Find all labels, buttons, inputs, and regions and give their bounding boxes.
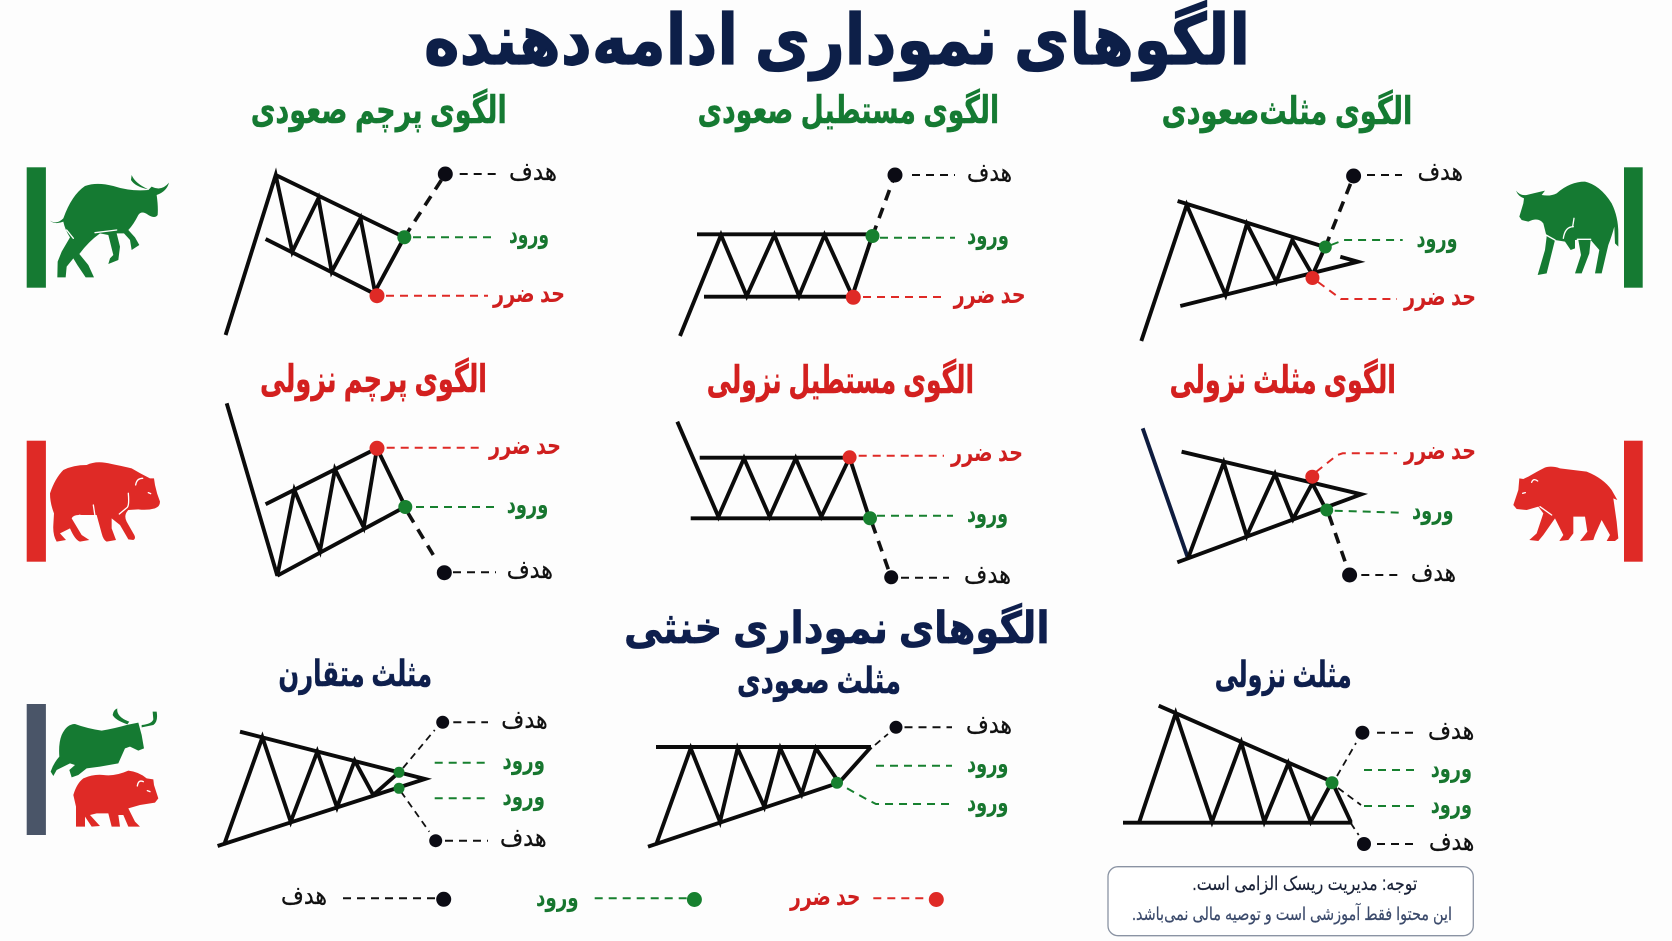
panel: bear triangle	[1143, 358, 1476, 587]
label: target lower: هدف	[1429, 828, 1474, 856]
chart: bull rectangle lines	[680, 234, 872, 336]
label: entry lower: ورود	[967, 789, 1008, 818]
chart: bear rectangle lines	[677, 422, 869, 518]
bearish marker bar left	[27, 441, 46, 562]
icon: bull left	[50, 175, 169, 277]
panel: descending triangle	[1123, 654, 1474, 856]
heading: bear triangle: الگوی مثلث نزولی	[1170, 358, 1396, 403]
label: stop loss: حد ضرر	[491, 280, 565, 309]
bullish marker bar left	[27, 167, 46, 288]
label: entry upper: ورود	[1431, 755, 1472, 784]
chart: descending triangle lines	[1123, 706, 1352, 823]
note line 1: توجه: مدیریت ریسک الزامی است.‏	[1192, 874, 1417, 895]
legend: stop loss	[788, 883, 944, 912]
bearish marker bar right	[1624, 441, 1643, 562]
title: الگوهای نموداری ادامه‌دهنده	[424, 0, 1250, 81]
panel: bear flag	[227, 357, 561, 584]
label: stop loss: حد ضرر	[949, 439, 1023, 468]
chart: bull flag lines	[226, 175, 404, 335]
chart: bear flag lines	[227, 403, 405, 576]
heading: bull rectangle: الگوی مستطیل صعودی	[698, 88, 999, 132]
legend: stop loss: حد ضرر	[788, 883, 860, 912]
icon: small bear	[73, 771, 158, 827]
chart: bull triangle lines	[1141, 201, 1358, 341]
label: entry lower: ورود	[502, 783, 545, 812]
label: entry: ورود	[507, 491, 548, 520]
label: entry: ورود	[967, 500, 1008, 529]
label: entry upper: ورود	[502, 747, 545, 776]
panel: bear rectangle	[677, 358, 1023, 589]
icon: bear right	[1513, 467, 1618, 541]
heading: bull triangle: الگوی مثلث‌صعودی	[1162, 89, 1412, 133]
label: target: هدف	[507, 556, 553, 584]
label: entry: ورود	[1416, 225, 1458, 254]
label: target: هدف	[967, 159, 1012, 187]
callout: risk note	[1108, 867, 1473, 936]
legend	[281, 882, 944, 913]
label: target: هدف	[964, 561, 1011, 589]
heading: bull flag: الگوی پرچم صعودی	[251, 88, 507, 133]
label: target: هدف	[509, 158, 557, 186]
label: entry upper: ورود	[967, 750, 1008, 779]
legend: target: هدف	[281, 882, 327, 910]
icon: bull right	[1516, 182, 1618, 275]
bullish marker bar right	[1624, 167, 1643, 288]
heading: ascending triangle: مثلث صعودی	[737, 660, 901, 702]
legend: target	[281, 882, 451, 910]
label: entry: ورود	[509, 221, 549, 250]
panel: symmetric triangle	[218, 653, 548, 852]
legend: entry: ورود	[536, 884, 579, 913]
label: target: هدف	[1411, 559, 1456, 587]
label: stop loss: حد ضرر	[1402, 437, 1476, 466]
label: target upper: هدف	[501, 706, 548, 734]
heading: bear flag: الگوی پرچم نزولی	[260, 357, 487, 402]
label: target lower: هدف	[500, 824, 547, 852]
section heading: neutral patterns: الگوهای نموداری خنثی	[624, 602, 1050, 654]
label: entry: ورود	[1412, 497, 1454, 526]
chart: symmetric triangle lines	[218, 732, 425, 846]
heading: bear rectangle: الگوی مستطیل نزولی	[707, 358, 974, 403]
heading: descending triangle: مثلث نزولی	[1215, 654, 1352, 696]
icon: small bull	[51, 708, 157, 777]
panel: bull rectangle	[680, 88, 1026, 336]
chart: ascending triangle lines	[648, 747, 871, 847]
legend: entry	[536, 884, 702, 913]
label: stop loss: حد ضرر	[1402, 283, 1476, 312]
label: stop loss: حد ضرر	[952, 281, 1026, 310]
label: target: هدف	[966, 711, 1012, 739]
chart: bear triangle lines	[1143, 428, 1188, 558]
icon: bear left	[50, 462, 160, 542]
label: entry lower: ورود	[1431, 791, 1472, 820]
label: target: هدف	[1418, 158, 1463, 186]
neutral marker bar	[27, 704, 46, 835]
label: entry: ورود	[967, 222, 1009, 251]
heading: symmetric triangle: مثلث متقارن	[278, 653, 432, 695]
panel: ascending triangle	[648, 660, 1012, 847]
label: stop loss: حد ضرر	[487, 432, 561, 461]
panel: bull triangle	[1141, 89, 1476, 341]
label: target upper: هدف	[1428, 717, 1474, 745]
panel: bull flag	[226, 88, 565, 335]
note line 2: این محتوا فقط آموزشی است و توصیه مالی نمی‌باشد.‏	[1132, 902, 1452, 925]
